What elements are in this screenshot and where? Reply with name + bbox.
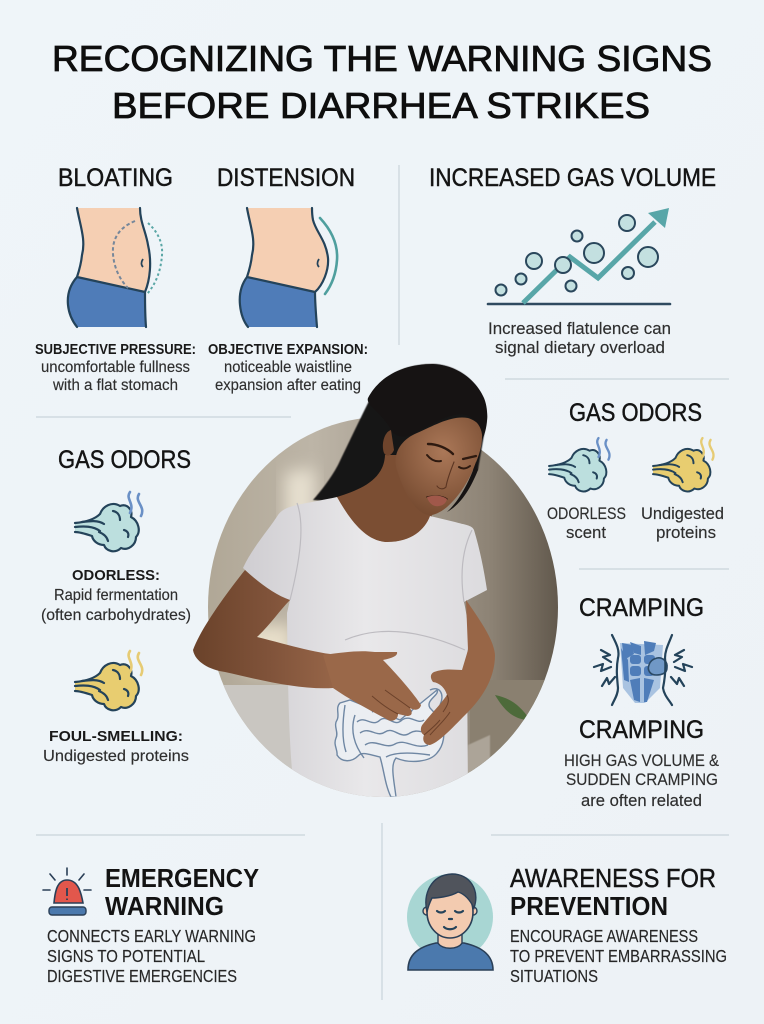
text: emergency description: DIGESTIVE EMERGENCIES (47, 966, 237, 986)
face (396, 417, 482, 515)
heading: emergency warning: EMERGENCY (105, 863, 259, 893)
panel: emergency warning (43, 863, 259, 986)
heading: emergency warning: WARNING (105, 891, 224, 921)
icon: abdomen cramp (594, 635, 692, 705)
text: awareness description: ENCOURAGE AWARENESS (510, 926, 698, 946)
left hand (323, 651, 421, 721)
label: odorless scent (547, 504, 626, 542)
heading: increased gas volume: INCREASED GAS VOLUME (429, 164, 716, 192)
caption: flatulence: Increased flatulence can (488, 319, 671, 338)
label: odorless: ODORLESS: (72, 567, 160, 584)
icon: distended torso (240, 208, 337, 327)
icon: siren (43, 868, 91, 915)
label: undigested proteins: proteins (656, 523, 716, 542)
shirt (243, 497, 487, 800)
intestines overlay (335, 689, 444, 797)
icon: calm person (407, 874, 493, 970)
label: foul-smelling: Undigested proteins (43, 748, 189, 765)
label: odorless (41, 567, 191, 624)
heading: cramping: CRAMPING (579, 594, 704, 622)
caption: flatulence: signal dietary overload (495, 338, 665, 357)
caption: flatulence (488, 319, 671, 357)
label: undigested proteins: Undigested (641, 504, 724, 523)
caption: cramping: HIGH GAS VOLUME & (564, 751, 720, 770)
heading: awareness for prevention: PREVENTION (510, 891, 668, 921)
heading: bloating: BLOATING (58, 164, 173, 192)
facial features (427, 444, 476, 499)
label: subjective pressure: uncomfortable fullness (41, 359, 190, 376)
caption: cramping: SUDDEN CRAMPING (566, 770, 718, 789)
label: subjective pressure: with a flat stomach (52, 377, 178, 394)
right arm and hand (421, 600, 495, 745)
heading: distension: DISTENSION (217, 164, 355, 192)
heading: awareness for prevention (510, 863, 716, 921)
label: odorless: Rapid fermentation (54, 587, 178, 604)
text: awareness description (510, 926, 727, 986)
text: awareness description: TO PREVENT EMBARRASSING (510, 946, 727, 966)
text: emergency description: SIGNS TO POTENTIAL (47, 946, 205, 966)
label: undigested proteins (641, 504, 724, 542)
title: RECOGNIZING THE WARNING SIGNS (52, 38, 712, 79)
label: foul-smelling: FOUL-SMELLING: (49, 728, 183, 745)
icon: odorless cloud (75, 492, 142, 551)
heading: gas odors right: GAS ODORS (569, 399, 702, 427)
title: BEFORE DIARRHEA STRIKES (112, 85, 650, 126)
label: objective expansion: noticeable waistline (224, 359, 352, 376)
panel: gas odors left (41, 446, 191, 765)
heading: awareness for prevention: AWARENESS FOR (510, 863, 716, 893)
label: odorless: (often carbohydrates) (41, 607, 191, 624)
ear (383, 430, 394, 456)
heading: gas odors: GAS ODORS (58, 446, 191, 474)
icon: odorless cloud small (549, 438, 610, 491)
label: subjective pressure: SUBJECTIVE PRESSURE: (35, 341, 196, 358)
neck (337, 455, 432, 542)
icon: bloating torso (68, 208, 162, 327)
panel: distension (208, 164, 368, 394)
heading: cramping second: CRAMPING (579, 716, 704, 744)
label: objective expansion (208, 341, 368, 394)
label: subjective pressure (35, 341, 196, 394)
hair back (313, 364, 487, 502)
caption: cramping: are often related (581, 791, 702, 810)
chart: rising arrow with bubbles (488, 208, 670, 304)
heading: emergency warning (105, 863, 259, 921)
text: emergency description: CONNECTS EARLY WARNING (47, 926, 256, 946)
photo background oval (205, 415, 565, 800)
caption: cramping (564, 751, 720, 810)
label: odorless scent: ODORLESS (547, 504, 626, 523)
icon: foul cloud (75, 651, 142, 710)
label: objective expansion: expansion after eating (215, 377, 361, 394)
hair front (368, 364, 487, 512)
panel: gas odors right (547, 399, 724, 542)
text: emergency description (47, 926, 256, 986)
icon: foul cloud small (653, 438, 714, 491)
left arm (193, 570, 345, 688)
panel: cramping (564, 594, 720, 810)
photo: woman holding stomach (193, 364, 565, 800)
finger lines (372, 690, 450, 735)
label: odorless scent: scent (566, 523, 606, 542)
panel: awareness for prevention (407, 863, 727, 986)
lips (427, 496, 447, 506)
label: foul-smelling (43, 728, 189, 765)
label: objective expansion: OBJECTIVE EXPANSION: (208, 341, 368, 358)
panel: bloating (35, 164, 196, 394)
text: awareness description: SITUATIONS (510, 966, 598, 986)
title (52, 38, 712, 126)
shirt folds (290, 503, 472, 650)
panel: increased gas volume (429, 164, 716, 357)
